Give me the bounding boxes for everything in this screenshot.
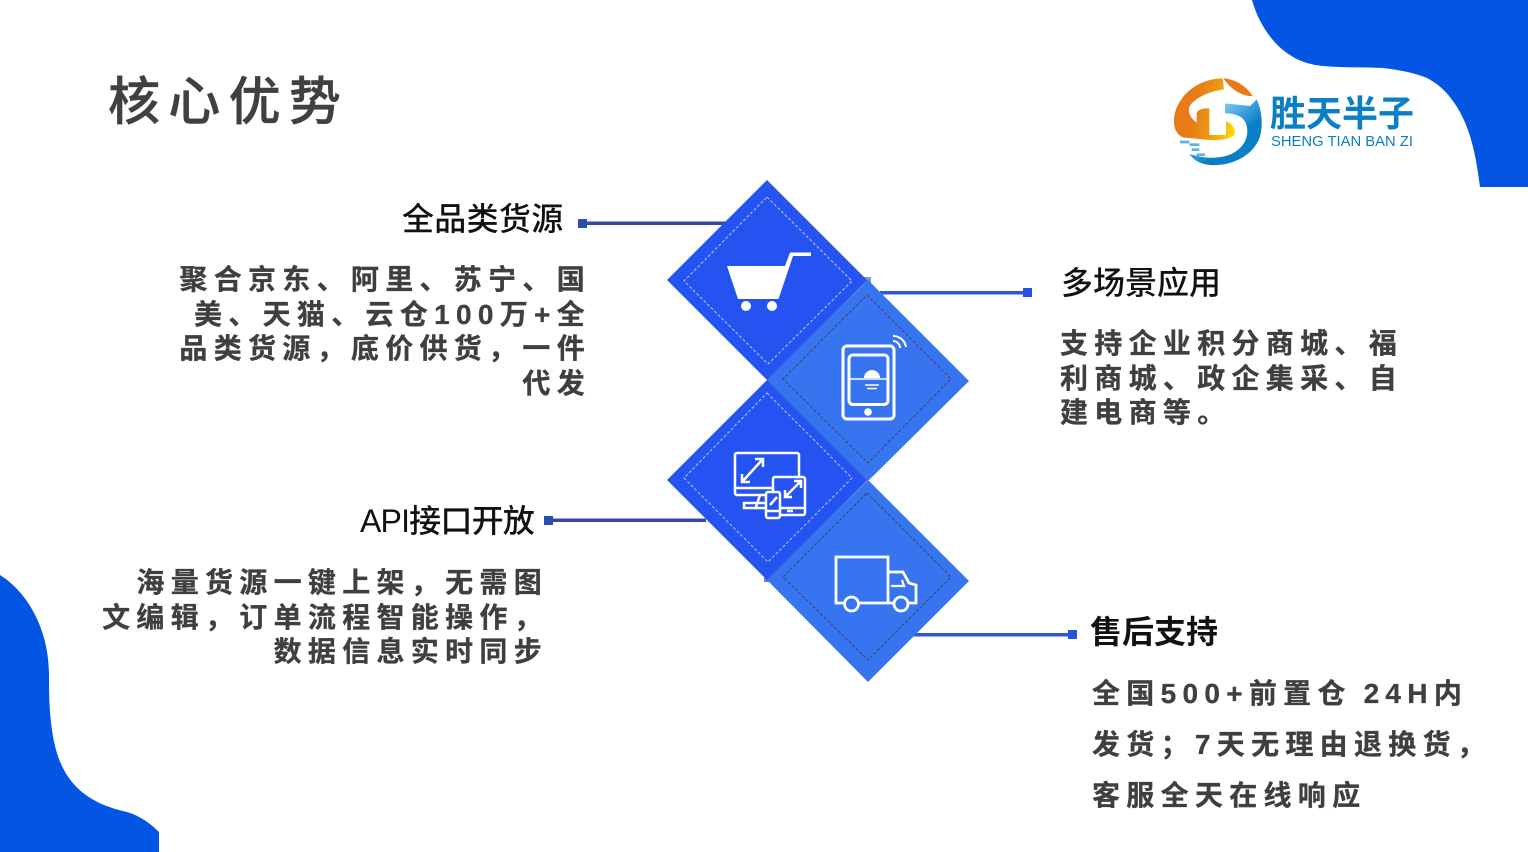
text: multi-scenario: 利商城、政企集采、自 [1060, 363, 1403, 394]
text: after sales: 客服全天在线响应 [1092, 780, 1366, 810]
text: API: 文编辑，订单流程智能操作， [102, 602, 548, 633]
connector: right top [863, 277, 1032, 297]
text: multi-scenario: 建电商等。 [1060, 397, 1232, 428]
connector: top left [578, 219, 730, 228]
text: after sales [1092, 678, 1491, 810]
diamond: delivery truck [767, 480, 969, 682]
icon: shopping cart [727, 252, 811, 311]
heading: multi-scenario: 多场景应用 [1061, 265, 1221, 301]
diamond: API devices [667, 380, 867, 580]
heading: after sales: 售后支持 [1090, 614, 1218, 650]
blob: top right [1252, 0, 1528, 187]
connector: API [544, 516, 706, 525]
text: full-category sourcing: 美、天猫、云仓100万+全 [194, 299, 591, 330]
text: API: 数据信息实时同步 [274, 636, 548, 667]
text: multi-scenario [1060, 328, 1403, 428]
text: API: 海量货源一键上架，无需图 [136, 567, 548, 598]
heading: full-category sourcing: 全品类货源 [402, 201, 564, 237]
text: after sales: 全国500+前置仓 24H内 [1092, 678, 1468, 708]
logo text: Latin name: SHENG TIAN BAN ZI [1271, 134, 1413, 150]
title: 核心优势 [108, 74, 349, 132]
text: API [102, 567, 548, 667]
text: full-category sourcing: 聚合京东、阿里、苏宁、国 [179, 264, 591, 295]
icon: responsive devices [735, 453, 805, 518]
text: full-category sourcing: 代发 [522, 368, 591, 399]
diamond: smartphone [767, 280, 969, 481]
text: full-category sourcing: 品类货源，底价供货，一件 [179, 333, 591, 364]
heading: API: API接口开放 [360, 503, 534, 539]
seams between diamonds [767, 280, 867, 580]
logo emblem [1174, 78, 1262, 165]
connector: after sales [764, 575, 1077, 639]
blob: bottom left [0, 575, 159, 852]
text: multi-scenario: 支持企业积分商城、福 [1060, 328, 1403, 359]
text: after sales: 发货；7天无理由退换货， [1092, 728, 1491, 760]
icon: smartphone with signal [843, 336, 906, 419]
icon: truck [836, 557, 916, 611]
logo text: Chinese name: 胜天半子 [1270, 93, 1414, 134]
diamond: shopping cart [667, 180, 867, 380]
text: full-category sourcing [179, 264, 591, 399]
